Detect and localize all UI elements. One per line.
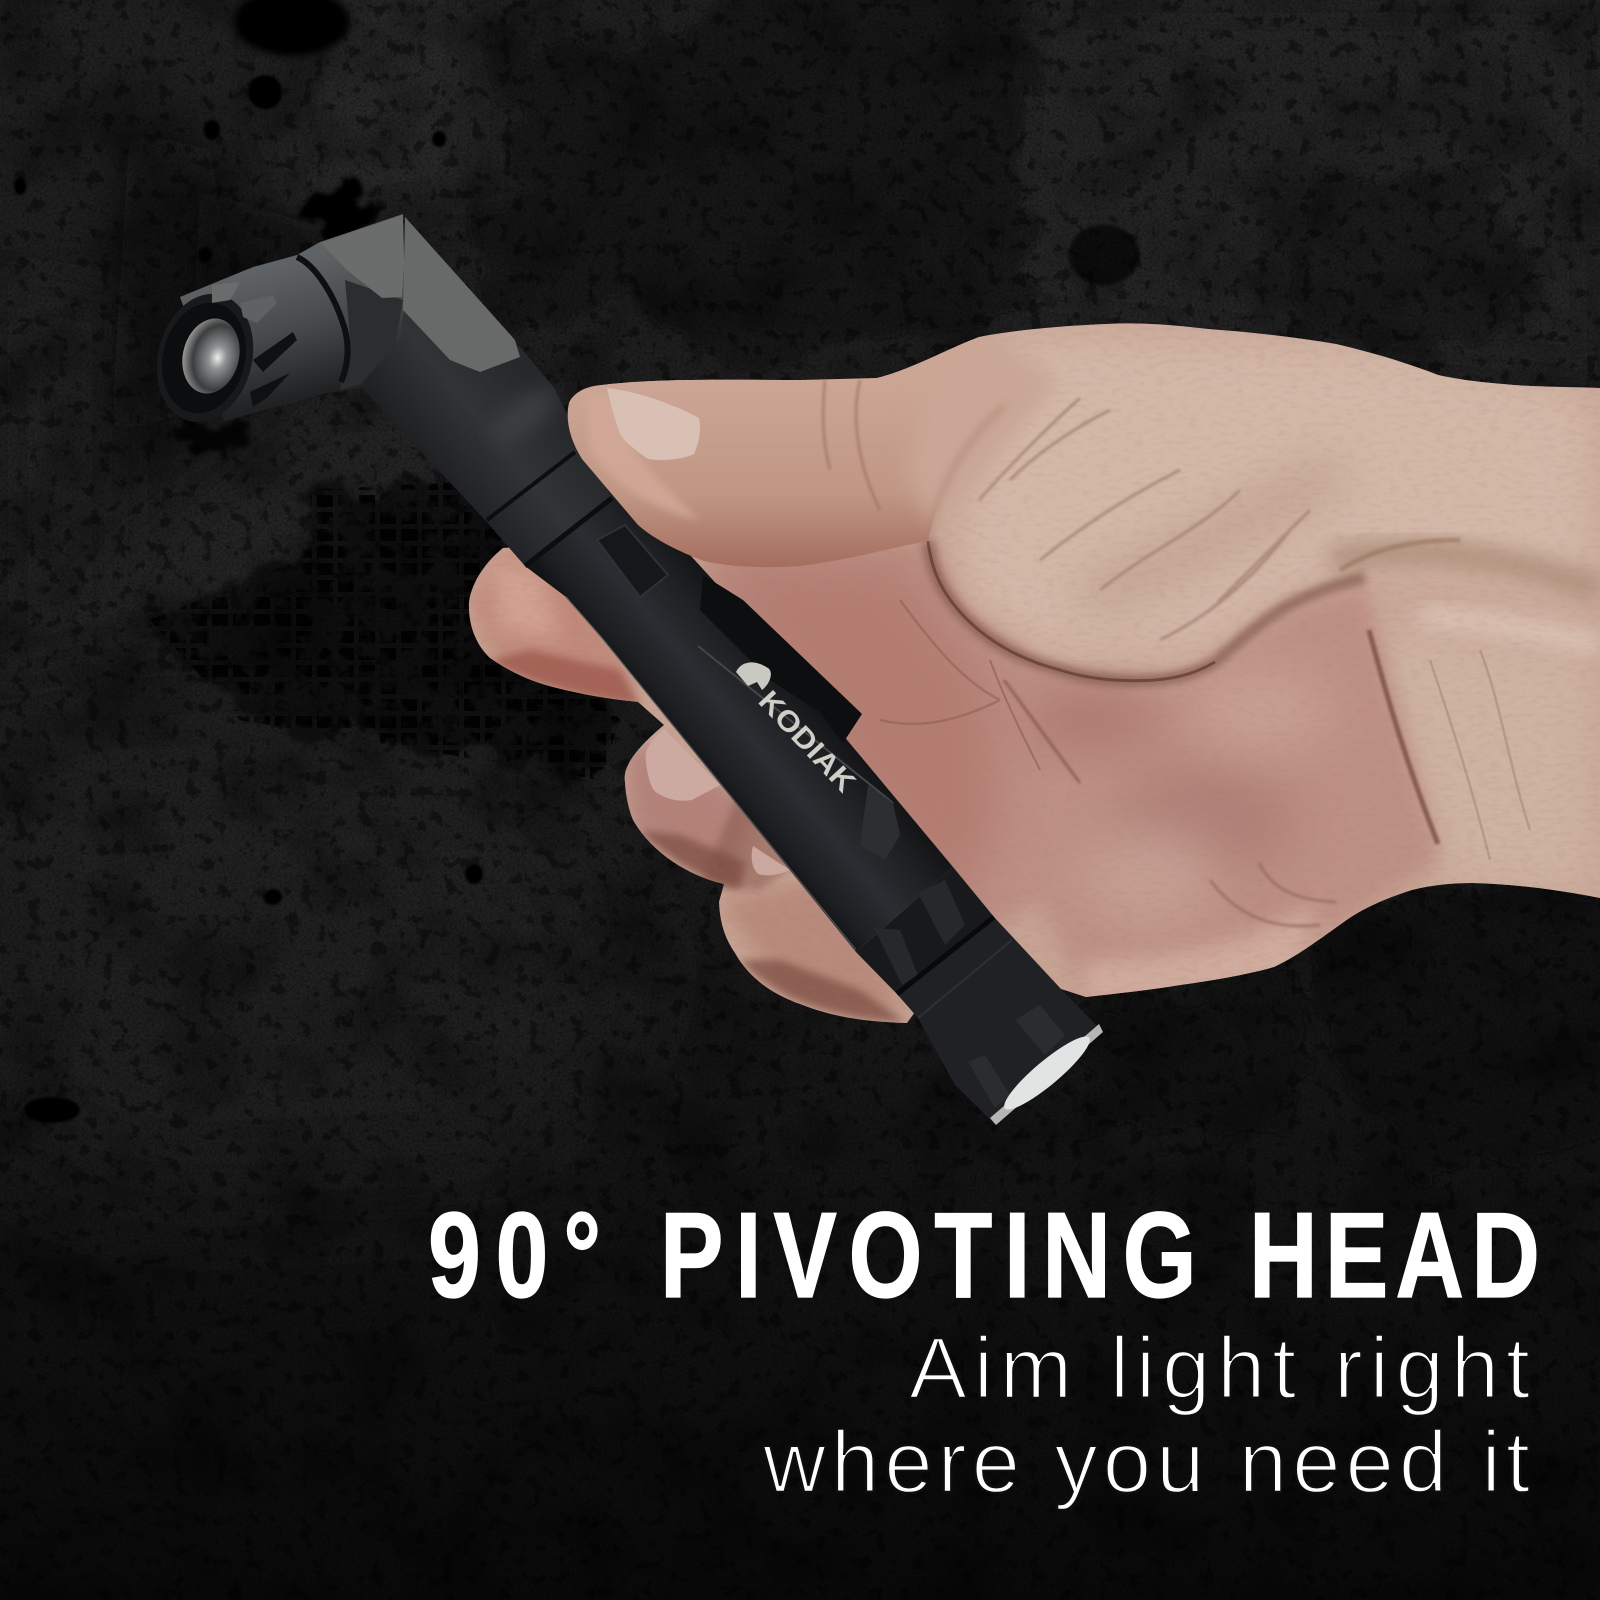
flashlight collar <box>856 867 994 994</box>
led lens <box>175 312 247 400</box>
finger tones <box>469 548 640 700</box>
pocket clip <box>700 575 862 743</box>
brick grid showing through the plaster <box>150 480 620 780</box>
subheading: Aim light right <box>909 1320 1530 1417</box>
button slot <box>597 525 668 597</box>
back of hand and wrist tones <box>950 330 1600 660</box>
headline: HEAD <box>1249 1188 1540 1324</box>
grey facet, right <box>403 217 520 372</box>
palm tones <box>700 540 1440 1000</box>
clip groove highlight <box>698 646 893 803</box>
headline: PIVOTING <box>660 1188 1197 1324</box>
palm creases <box>1369 630 1438 844</box>
hand and fingers holding the flashlight <box>460 320 1600 1040</box>
subheading: where you need it <box>762 1414 1530 1511</box>
headline: 90° <box>428 1188 601 1324</box>
icon: fingernail, middle finger <box>646 729 720 801</box>
flashlight with pivoting head <box>144 214 1103 1125</box>
subheading <box>762 1320 1530 1511</box>
soft blend between thumb and back of hand <box>905 335 1060 530</box>
flashlight tail lens <box>990 1024 1103 1125</box>
head cylinder <box>180 214 405 421</box>
headline <box>428 1188 1540 1324</box>
icon: thumbnail <box>607 388 700 460</box>
thumb over the flashlight <box>568 335 1060 567</box>
flashlight tail section <box>897 917 1103 1125</box>
head ring <box>297 257 348 382</box>
brand name: KODIAK <box>752 685 861 799</box>
icon: fingernail, ring finger <box>752 846 790 875</box>
icon: bear logo <box>736 662 771 690</box>
upper sleeve <box>362 280 612 566</box>
kodiak logo <box>736 662 861 799</box>
dark rough patches <box>150 0 1600 1180</box>
flashlight main barrel <box>525 450 953 952</box>
front knurled bezel <box>144 282 297 432</box>
thenar mound crease <box>928 541 1365 681</box>
grey facet, top <box>321 215 404 298</box>
